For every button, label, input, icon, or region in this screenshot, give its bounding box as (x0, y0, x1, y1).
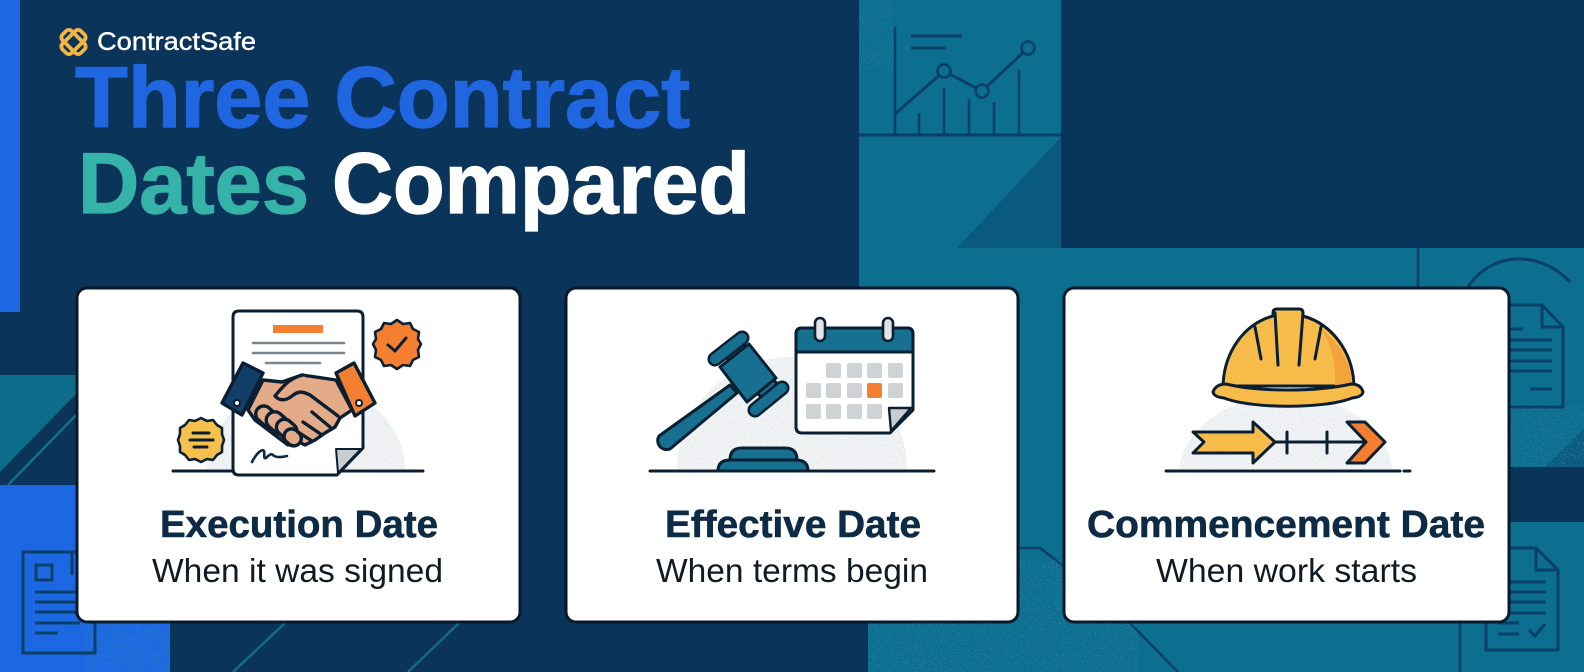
card heading: Execution Date (160, 504, 438, 546)
icon: orange check badge (373, 320, 421, 369)
icon: hard hat (1213, 309, 1363, 406)
decorative icon: lower left document (23, 552, 95, 653)
card subheading: When work starts (1156, 552, 1417, 589)
icon: calendar (796, 318, 913, 433)
card heading: Effective Date (665, 504, 921, 546)
icon: yellow note badge (178, 418, 224, 462)
decorative icon: line chart (859, 27, 1061, 135)
title word: Dates: Dates (78, 136, 309, 232)
logo (60, 28, 256, 56)
icon: document (233, 311, 363, 475)
illustration: gavel and calendar (650, 318, 934, 471)
decorative icon: upper right document (1505, 305, 1563, 407)
panel: commencement date (1064, 288, 1509, 622)
card subheading: When it was signed (152, 552, 443, 589)
logo wordmark: ContractSafe (97, 28, 256, 56)
title line one: Three Contract (75, 50, 690, 146)
illustration: hard hat and timeline arrow (1166, 309, 1410, 471)
decorative icon: lower right document (1486, 548, 1558, 650)
card heading: Commencement Date (1087, 504, 1485, 546)
illustration: signed contract and handshake (173, 311, 423, 475)
panel: effective date (566, 288, 1018, 622)
card subheading: When terms begin (656, 552, 928, 589)
title word: Compared: Compared (332, 136, 750, 232)
title (75, 50, 750, 232)
icon: timeline arrow (1193, 422, 1385, 463)
logo mark (60, 28, 87, 56)
icon: handshake (222, 363, 375, 449)
icon: gavel (658, 338, 808, 471)
panel: execution date (77, 288, 520, 622)
